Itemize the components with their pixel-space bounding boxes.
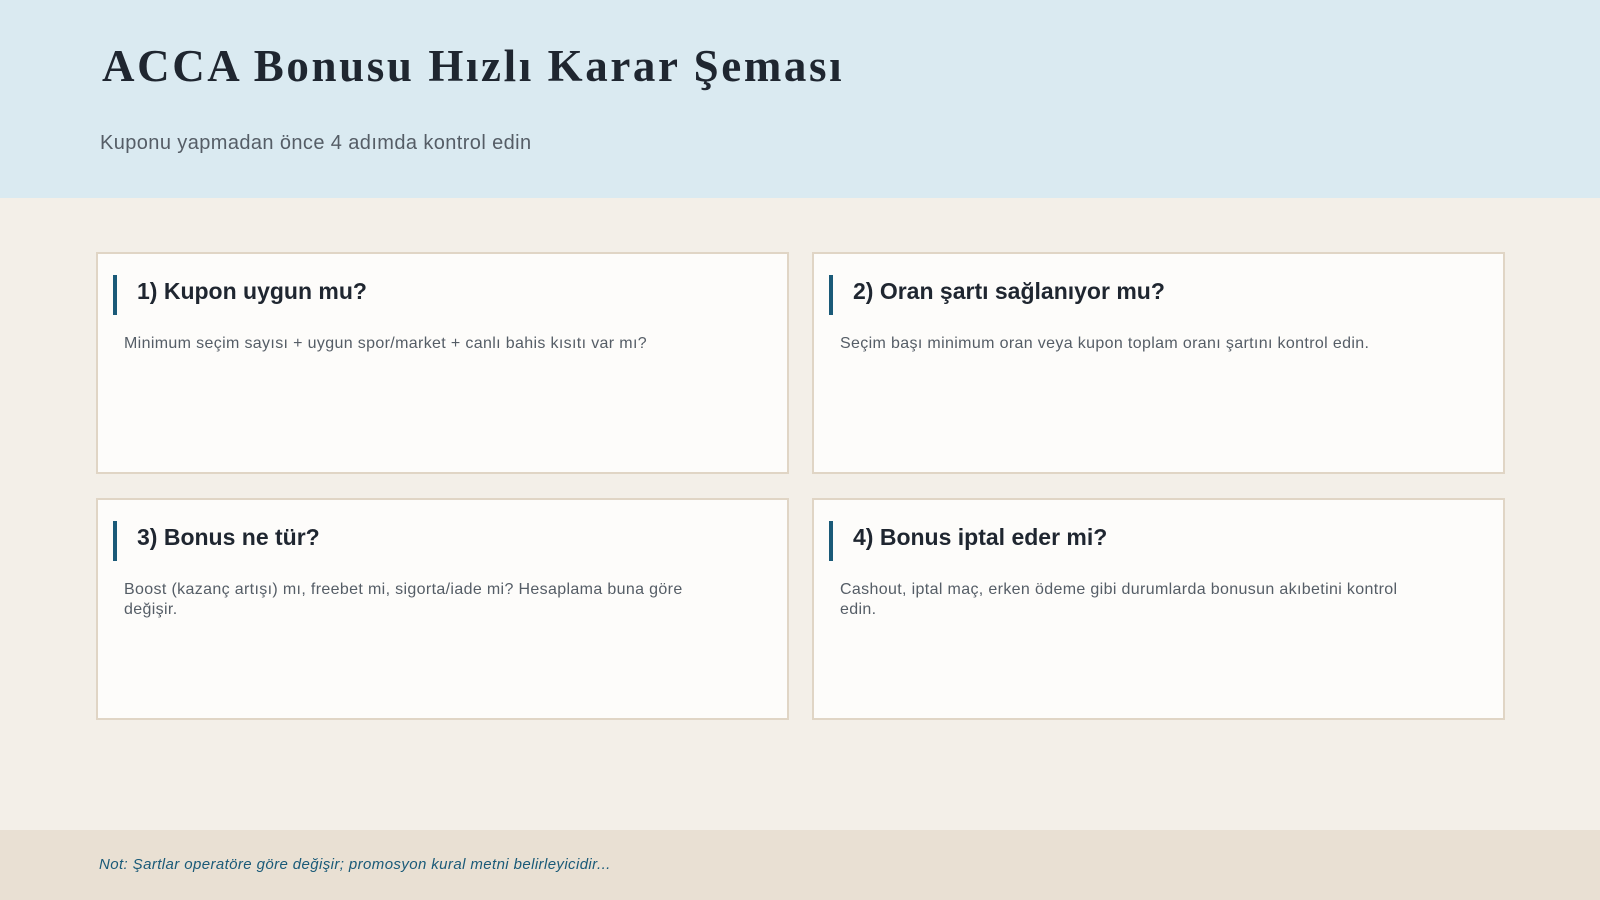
header bbox=[0, 0, 1600, 198]
panel: step 3: Boost (kazanç artışı) mı, freebet mi, sigorta/iade mi? Hesaplama buna göre değişir. bbox=[124, 581, 683, 618]
footer note bbox=[0, 830, 1600, 900]
panel: step 3: 3) Bonus ne tür? bbox=[137, 524, 320, 550]
panel: step 3 bbox=[96, 498, 789, 720]
panel: step 1: 1) Kupon uygun mu? bbox=[137, 278, 367, 304]
panel: step 2: 2) Oran şartı sağlanıyor mu? bbox=[853, 278, 1165, 304]
subtitle: Kuponu yapmadan önce 4 adımda kontrol edin bbox=[100, 132, 532, 154]
footer note: Not: Şartlar operatöre göre değişir; promosyon kural metni belirleyicidir... bbox=[99, 856, 611, 873]
panel: step 1 bbox=[96, 252, 789, 474]
panel: step 4 bbox=[812, 498, 1505, 720]
panel: step 4: edin. bbox=[840, 601, 876, 618]
panel: step 2 bbox=[812, 252, 1505, 474]
panel: step 2: Seçim başı minimum oran veya kupon toplam oranı şartını kontrol edin. bbox=[840, 335, 1369, 352]
panel: step 1: Minimum seçim sayısı + uygun spor/market + canlı bahis kısıtı var mı? bbox=[124, 335, 647, 352]
panel: step 4: Cashout, iptal maç, erken ödeme gibi durumlarda bonusun akıbetini kontrol bbox=[840, 581, 1397, 598]
title: ACCA Bonusu Hızlı Karar Şeması bbox=[102, 41, 844, 91]
panel: step 4: 4) Bonus iptal eder mi? bbox=[853, 524, 1107, 550]
